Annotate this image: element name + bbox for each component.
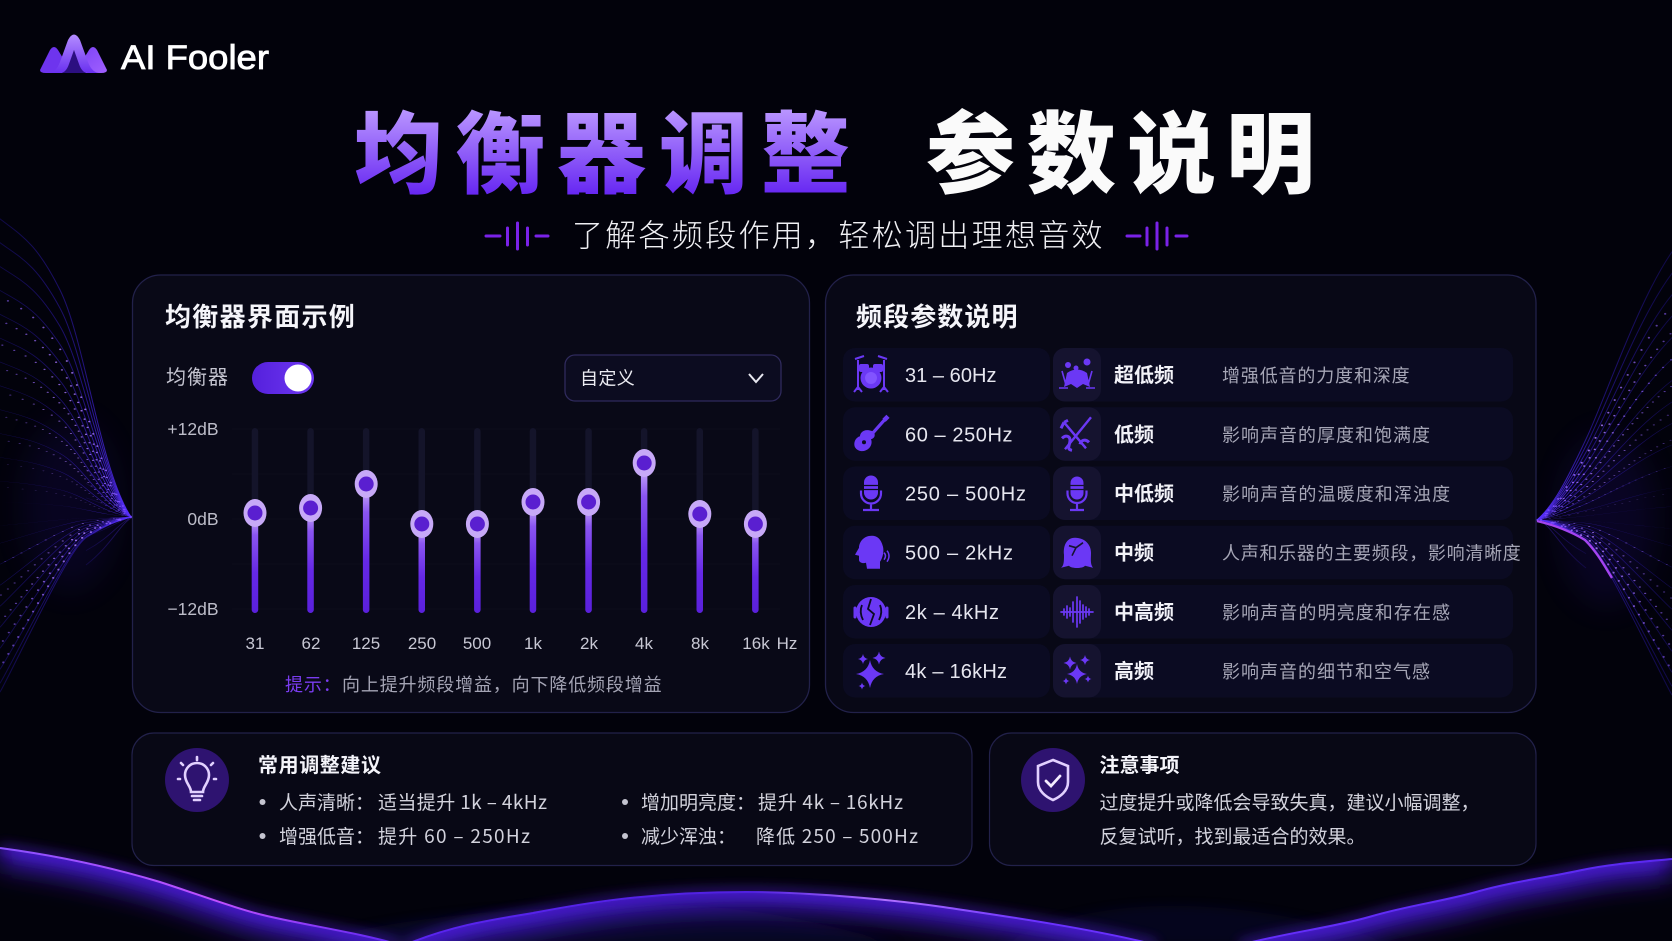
logo [40,34,269,77]
icon: shield [1021,748,1085,812]
description: 影响声音的温暖度和浑浊度 [1222,480,1451,506]
icon: light bulb [165,748,229,812]
tip list: 适当提升 1k – 4kHz [378,788,547,815]
row: 4k-16kHz [843,644,1513,698]
band: 中频 [1114,537,1154,566]
range: 250 – 500Hz [905,484,1026,506]
slider handles [244,449,767,538]
subtitle text: 了解各频段作用，轻松调出理想音效 [572,210,1105,256]
dB axis labels: +12dB [167,419,218,439]
heading: tuning tips: 常用调整建议 [258,749,382,778]
description: 影响声音的细节和空气感 [1222,658,1431,684]
range: 500 – 2kHz [905,543,1013,565]
tip list: 提升 60 – 250Hz [378,822,530,849]
row: 2k-4kHz [843,585,1513,638]
icon: guitar [854,416,888,451]
frequency labels [246,634,797,653]
row: 60-250Hz [843,407,1513,461]
heading: frequency parameters: 频段参数说明 [856,297,1019,334]
panel: frequency parameters [826,275,1536,712]
tip list [260,788,918,849]
heading: equalizer example: 均衡器界面示例 [165,297,356,334]
frequency labels: 125 [352,634,380,653]
dB axis labels [167,419,218,619]
range: 31 – 60Hz [905,365,996,387]
tip list: 增强低音： [279,822,374,849]
frequency labels: 250 [408,634,436,653]
icon: drum splash [1059,358,1095,388]
tip list: 降低 250 – 500Hz [756,822,918,849]
icon: sparkles [856,652,886,690]
panel: cautions [990,733,1536,866]
heading: cautions: 注意事项 [1100,749,1180,778]
slider active fills [252,463,759,613]
band: 超低频 [1114,359,1174,388]
range: 4k – 16kHz [905,661,1007,683]
right particle wave mesh [1537,245,1672,700]
caution text: 过度提升或降低会导致失真，建议小幅调整， [1100,788,1480,815]
icon: waveform [1061,597,1093,627]
equalizer label: 均衡器 [166,361,229,390]
frequency labels: Hz [777,634,797,653]
tip list: 减少浑浊： [641,822,736,849]
left wave mark [486,223,548,249]
hint text: 提示： [285,671,342,697]
hint text: 向上提升频段增益，向下降低频段增益 [342,671,662,697]
icon: crossed guitars [1061,417,1091,450]
title [354,83,1315,212]
title white part: 参数说明 [926,83,1315,212]
tip list: 人声清晰： [279,788,374,815]
band: 中低频 [1114,478,1174,506]
frequency labels: 8k [691,634,709,653]
preset dropdown: 自定义 [580,364,635,390]
frequency labels: 500 [463,634,491,653]
preset dropdown [565,355,781,401]
panel: equalizer example [132,275,810,712]
band: 低频 [1114,418,1154,447]
tip list: 提升 4k – 16kHz [758,788,903,815]
row: 250-500Hz [843,466,1513,520]
band: 中高频 [1114,596,1174,625]
icon: microphone [861,476,881,510]
description: 人声和乐器的主要频段，影响清晰度 [1222,540,1522,566]
panel: tuning tips [132,733,972,866]
caution text: 反复试听，找到最适合的效果。 [1100,822,1366,849]
icon: drum kit [854,356,888,392]
caution text [1100,788,1480,849]
description: 影响声音的厚度和饱满度 [1222,421,1431,447]
row: 31-60Hz [843,348,1513,402]
logo mark [40,34,107,73]
title purple part: 均衡器调整 [354,83,850,212]
frequency labels: 16k [742,634,770,653]
frequency labels: 2k [580,634,598,653]
equalizer grid lines [232,429,780,609]
toggle switch [252,362,314,394]
range: 60 – 250Hz [905,424,1012,446]
subtitle with wave marks [486,210,1187,256]
dB axis labels: 0dB [187,509,218,529]
range: 2k – 4kHz [905,602,999,624]
frequency labels: 1k [524,634,542,653]
icon: headphone globe [855,597,887,627]
tip list: 增加明亮度： [641,788,755,815]
description: 增强低音的力度和深度 [1222,362,1410,388]
icon: microphone [1068,476,1086,510]
icon: head round [1061,538,1093,568]
icon: sparkles alt [1062,655,1092,684]
bottom glowing waves [0,848,1672,941]
icon: head speaking [855,536,889,569]
dB axis labels: −12dB [167,599,218,619]
right wave mark [1127,223,1187,249]
slider tracks [252,428,759,613]
row: 500-2kHz [843,526,1522,579]
description: 影响声音的明亮度和存在感 [1222,599,1451,625]
frequency labels: 62 [302,634,320,653]
logo wordmark: AI Fooler [121,39,269,77]
band: 高频 [1114,655,1154,684]
frequency labels: 4k [635,634,653,653]
left particle wave mesh [0,215,133,697]
frequency labels: 31 [246,634,264,653]
